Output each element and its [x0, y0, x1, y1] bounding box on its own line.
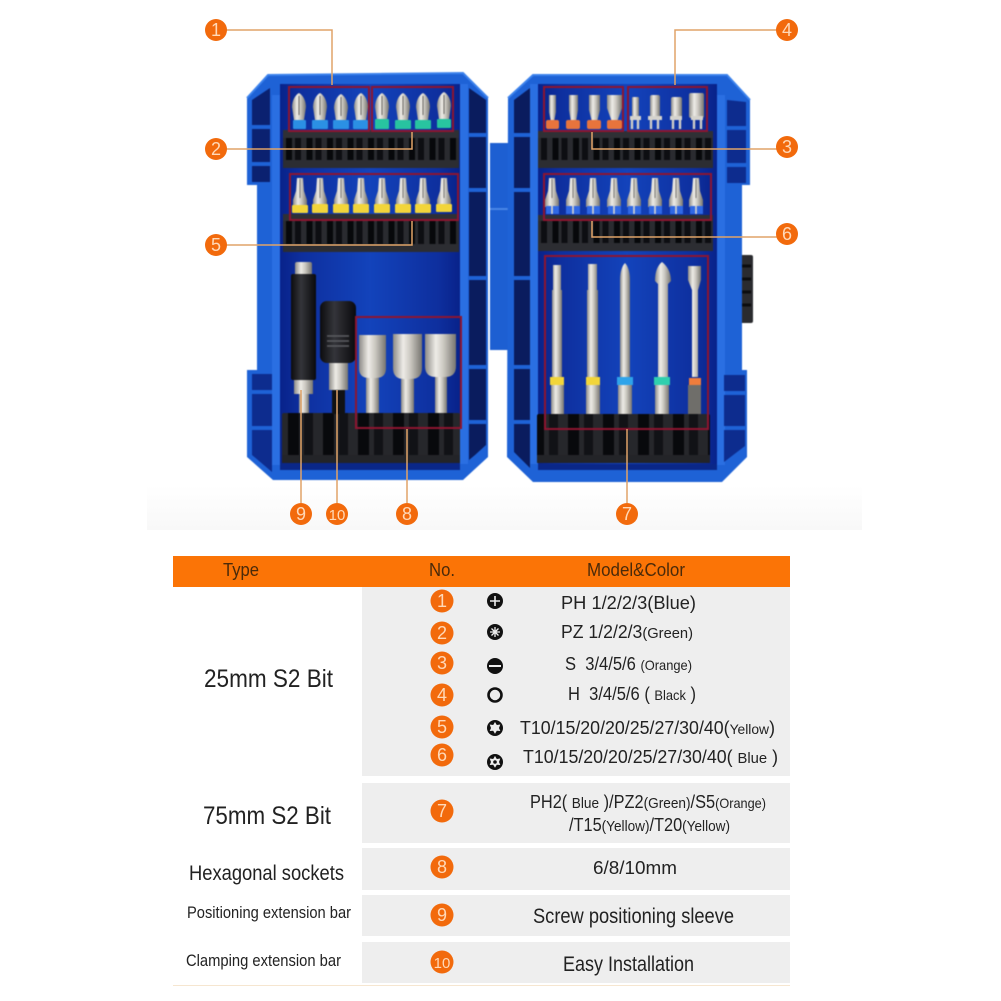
row 5 text: T10/15/20/20/25/27/30/40(Yellow)	[520, 718, 775, 738]
row 9 number: 9	[437, 905, 447, 925]
row 3 text: S 3/4/5/6 (Orange)	[565, 654, 692, 674]
type label: 25mm S2 Bit: 25mm S2 Bit	[204, 665, 333, 693]
long 75mm bits	[550, 262, 701, 414]
callout 9	[290, 390, 312, 525]
row 7 text line 1: PH2( Blue )/PZ2(Green)/S5(Orange)	[530, 792, 766, 812]
background fade of product photo	[147, 485, 862, 530]
type label: positioning extension bar: Positioning extension bar	[187, 903, 351, 922]
table header: Type	[223, 560, 259, 580]
row 4 number: 4	[437, 685, 447, 705]
clamping extension bar	[320, 301, 356, 414]
row 1 number	[430, 590, 454, 612]
row 10 number: 10	[434, 955, 450, 972]
icon: Torx	[487, 720, 503, 736]
callout 2: 2	[211, 139, 221, 159]
T bits blue	[545, 178, 703, 214]
icon: Pozidriv	[487, 624, 503, 640]
callout 6	[592, 221, 798, 245]
row 8 number: 8	[437, 857, 447, 877]
row 5 number	[430, 716, 454, 738]
row 5 number: 5	[437, 717, 447, 737]
table row: hexagonal sockets	[189, 848, 790, 890]
row 6 number: 6	[437, 745, 447, 765]
row 6 text: T10/15/20/20/25/27/30/40( Blue )	[523, 747, 778, 767]
callout 3: 3	[782, 137, 792, 157]
icon: Torx security	[487, 754, 503, 770]
callout 4	[675, 19, 798, 85]
callout 8: 8	[402, 504, 412, 524]
table header: Model&Color	[587, 560, 685, 580]
callout 10	[326, 390, 348, 525]
callout 4: 4	[782, 20, 792, 40]
case hinge	[490, 143, 508, 350]
row 9 number	[430, 904, 454, 926]
row 1 number: 1	[437, 591, 447, 611]
table row: positioning extension bar	[187, 895, 790, 936]
callout 1	[205, 19, 332, 85]
callout 5	[205, 221, 412, 256]
product photo: open bit case	[247, 73, 753, 482]
row 7 number	[430, 800, 454, 822]
table row group: 25mm S2 Bit	[204, 587, 790, 776]
row 8 text: 6/8/10mm	[593, 858, 677, 878]
PH bits blue	[292, 93, 368, 129]
table row: clamping extension bar	[186, 942, 790, 983]
table row: 75mm S2 Bit	[203, 783, 790, 843]
table header	[173, 556, 790, 587]
row 7 text line 2: /T15(Yellow)/T20(Yellow)	[569, 815, 730, 835]
bit holder strips	[282, 130, 713, 463]
side clip	[737, 255, 753, 323]
right case shell	[507, 75, 750, 482]
row 3 number: 3	[437, 653, 447, 673]
callout 7: 7	[622, 504, 632, 524]
hex sockets	[359, 334, 456, 413]
red selection boxes	[289, 87, 711, 429]
callout 5: 5	[211, 235, 221, 255]
row 2 number: 2	[437, 623, 447, 643]
callout 8	[396, 429, 418, 525]
row 4 text: H 3/4/5/6 ( Black )	[568, 684, 696, 704]
callout 10: 10	[329, 507, 345, 524]
PZ bits green	[375, 92, 451, 129]
positioning extension bar	[291, 262, 316, 413]
row 2 text: PZ 1/2/2/3(Green)	[561, 622, 693, 642]
row 9 text: Screw positioning sleeve	[533, 905, 734, 928]
left case shell	[247, 73, 488, 480]
row 1 text: PH 1/2/2/3(Blue)	[561, 593, 696, 613]
icon: hex ring	[488, 688, 502, 702]
row 4 number	[430, 684, 454, 706]
callout 7	[616, 429, 638, 525]
row 7 number: 7	[437, 801, 447, 821]
icon: Phillips	[487, 593, 503, 609]
row 8 number	[430, 856, 454, 878]
hex bits silver	[630, 93, 704, 129]
callout 1: 1	[211, 20, 221, 40]
row 3 number	[430, 652, 454, 674]
callout 6: 6	[782, 224, 792, 244]
callout 2	[205, 132, 412, 160]
type label: clamping extension bar: Clamping extension bar	[186, 951, 341, 970]
row 2 number	[430, 622, 454, 644]
row 10 text: Easy Installation	[563, 953, 694, 976]
type label: hexagonal sockets: Hexagonal sockets	[189, 862, 344, 885]
callout 3	[592, 132, 798, 158]
slotted bits orange	[546, 95, 622, 129]
table header: No.	[429, 560, 455, 580]
callout 9: 9	[296, 504, 306, 524]
row 6 number	[430, 744, 454, 766]
T bits yellow	[292, 178, 452, 213]
row 10 number	[430, 950, 454, 974]
icon: slotted	[487, 658, 503, 674]
type label: 75mm S2 Bit: 75mm S2 Bit	[203, 802, 331, 830]
